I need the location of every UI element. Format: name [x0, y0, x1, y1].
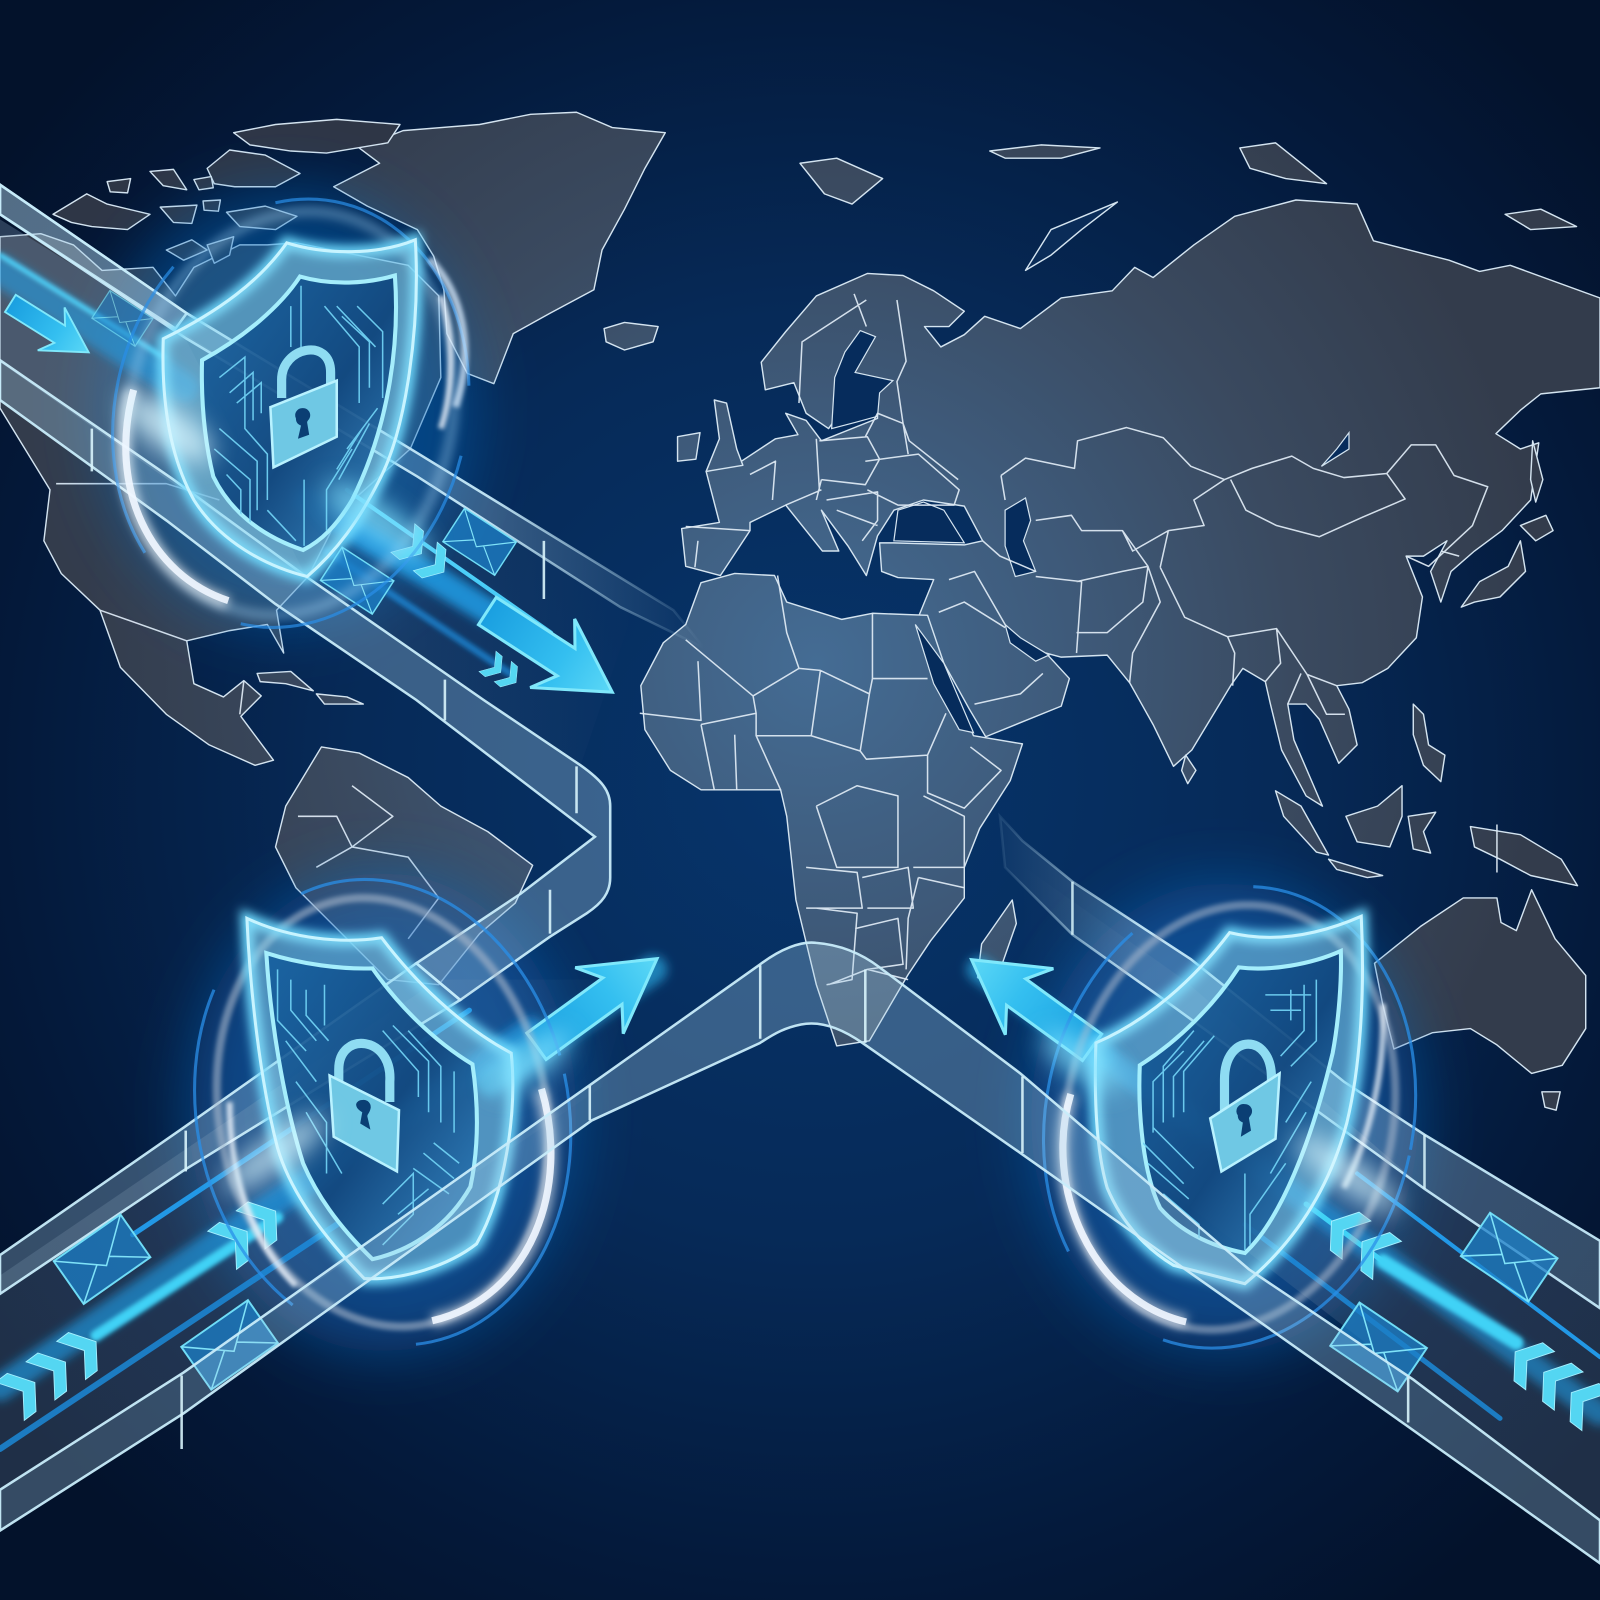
padlock	[1210, 1044, 1280, 1171]
tube upper wall	[0, 963, 460, 1294]
seams	[182, 965, 1408, 1449]
lower wall left and bend	[0, 943, 1600, 1563]
beams	[0, 969, 653, 1449]
australia	[1374, 890, 1586, 1073]
inland seas	[832, 331, 1349, 733]
philippines	[1413, 704, 1445, 782]
caspian sea	[1005, 498, 1036, 577]
ring three highlight	[1344, 1004, 1383, 1188]
svalbard	[800, 158, 883, 204]
tube interior	[0, 219, 633, 765]
shield glow	[1095, 916, 1362, 1284]
new guinea	[1470, 827, 1578, 886]
shield one: top left	[163, 240, 416, 577]
beams	[980, 969, 1600, 1418]
iceland	[604, 322, 658, 350]
ring three	[1002, 852, 1458, 1383]
uk and ireland	[706, 400, 743, 471]
circuit traces	[278, 969, 459, 1245]
tube: top left to bend	[0, 185, 704, 1000]
africa	[641, 573, 1022, 1046]
eurasia	[682, 200, 1600, 806]
java	[1329, 859, 1383, 878]
shield glow	[247, 918, 513, 1279]
japan	[1461, 541, 1526, 607]
shield glow	[163, 240, 416, 577]
seams	[92, 429, 577, 934]
light beams and flow: bottom left	[0, 926, 681, 1449]
persian gulf	[1005, 624, 1049, 661]
light beams and flow: top left	[0, 255, 635, 726]
shield outer plate	[247, 918, 513, 1279]
tube: bottom left upper wall and interior	[0, 963, 633, 1490]
north america	[0, 234, 441, 765]
seams	[1072, 882, 1424, 1189]
far east islands	[1505, 209, 1577, 230]
envelope	[54, 1214, 150, 1304]
arrow big	[465, 577, 635, 726]
cuba and caribbean islands	[257, 671, 313, 691]
sumatra	[1276, 791, 1329, 855]
greenland	[334, 112, 665, 384]
shield outer plate	[163, 240, 416, 577]
novaya zemlya	[1026, 202, 1117, 270]
tube interior	[918, 857, 1600, 1520]
tube interior left	[0, 219, 306, 577]
beams	[0, 255, 551, 673]
south america	[276, 747, 533, 985]
envelope far	[92, 290, 153, 346]
tube interior	[0, 980, 633, 1490]
shield two: bottom left	[247, 918, 513, 1279]
sakhalin	[1531, 441, 1543, 502]
arrow big	[512, 926, 681, 1079]
envelope	[181, 1300, 278, 1390]
seams	[184, 1131, 187, 1171]
canadian arctic islands	[53, 119, 400, 263]
ring two	[152, 844, 613, 1380]
arrow small top left	[0, 282, 102, 374]
world map	[0, 112, 1600, 1110]
siberian islands	[1240, 143, 1327, 184]
ring two highlight	[230, 1102, 296, 1286]
tube lower wall with bend	[0, 360, 610, 1000]
tube upper wall	[1000, 816, 1600, 1308]
light beams and flow: right	[948, 927, 1600, 1431]
circuit traces	[1143, 980, 1316, 1260]
shield inner face	[1139, 951, 1341, 1253]
tube: long lower wall in front of shields	[0, 943, 1600, 1563]
tube upper wall	[0, 185, 704, 648]
arrow big	[948, 927, 1116, 1080]
tasmania	[1542, 1092, 1560, 1110]
envelope	[320, 547, 394, 614]
shield three: bottom right	[1095, 916, 1362, 1284]
ring highlights in front	[230, 296, 1383, 1286]
chevrons	[1317, 1202, 1600, 1431]
borneo	[1346, 786, 1402, 847]
shield inner face	[266, 953, 477, 1259]
lens flares and streaks	[115, 383, 1406, 1222]
baltic sea	[832, 331, 893, 429]
shield outer plate	[1095, 916, 1362, 1284]
black sea	[894, 502, 964, 543]
padlock	[330, 1043, 399, 1171]
arctic islands russia	[990, 145, 1100, 158]
red sea	[915, 624, 973, 733]
ring one highlight	[441, 296, 451, 429]
ring one	[68, 161, 513, 666]
chevrons	[0, 1192, 290, 1420]
tube upper wall left	[0, 185, 187, 329]
far shield halos	[97, 189, 1418, 1352]
envelope	[1461, 1213, 1558, 1302]
circuit traces	[214, 286, 383, 546]
shield inner face	[202, 276, 396, 550]
lake baikal	[1321, 433, 1349, 466]
tube: right upper branch	[918, 816, 1600, 1520]
sulawesi	[1408, 812, 1436, 853]
country borders	[56, 294, 1497, 985]
sri lanka	[1182, 755, 1196, 784]
chevrons	[391, 524, 525, 693]
envelope	[443, 508, 516, 575]
rings behind shields	[68, 161, 1458, 1383]
envelope	[1330, 1302, 1427, 1391]
madagascar	[978, 900, 1016, 985]
padlock	[270, 350, 337, 467]
